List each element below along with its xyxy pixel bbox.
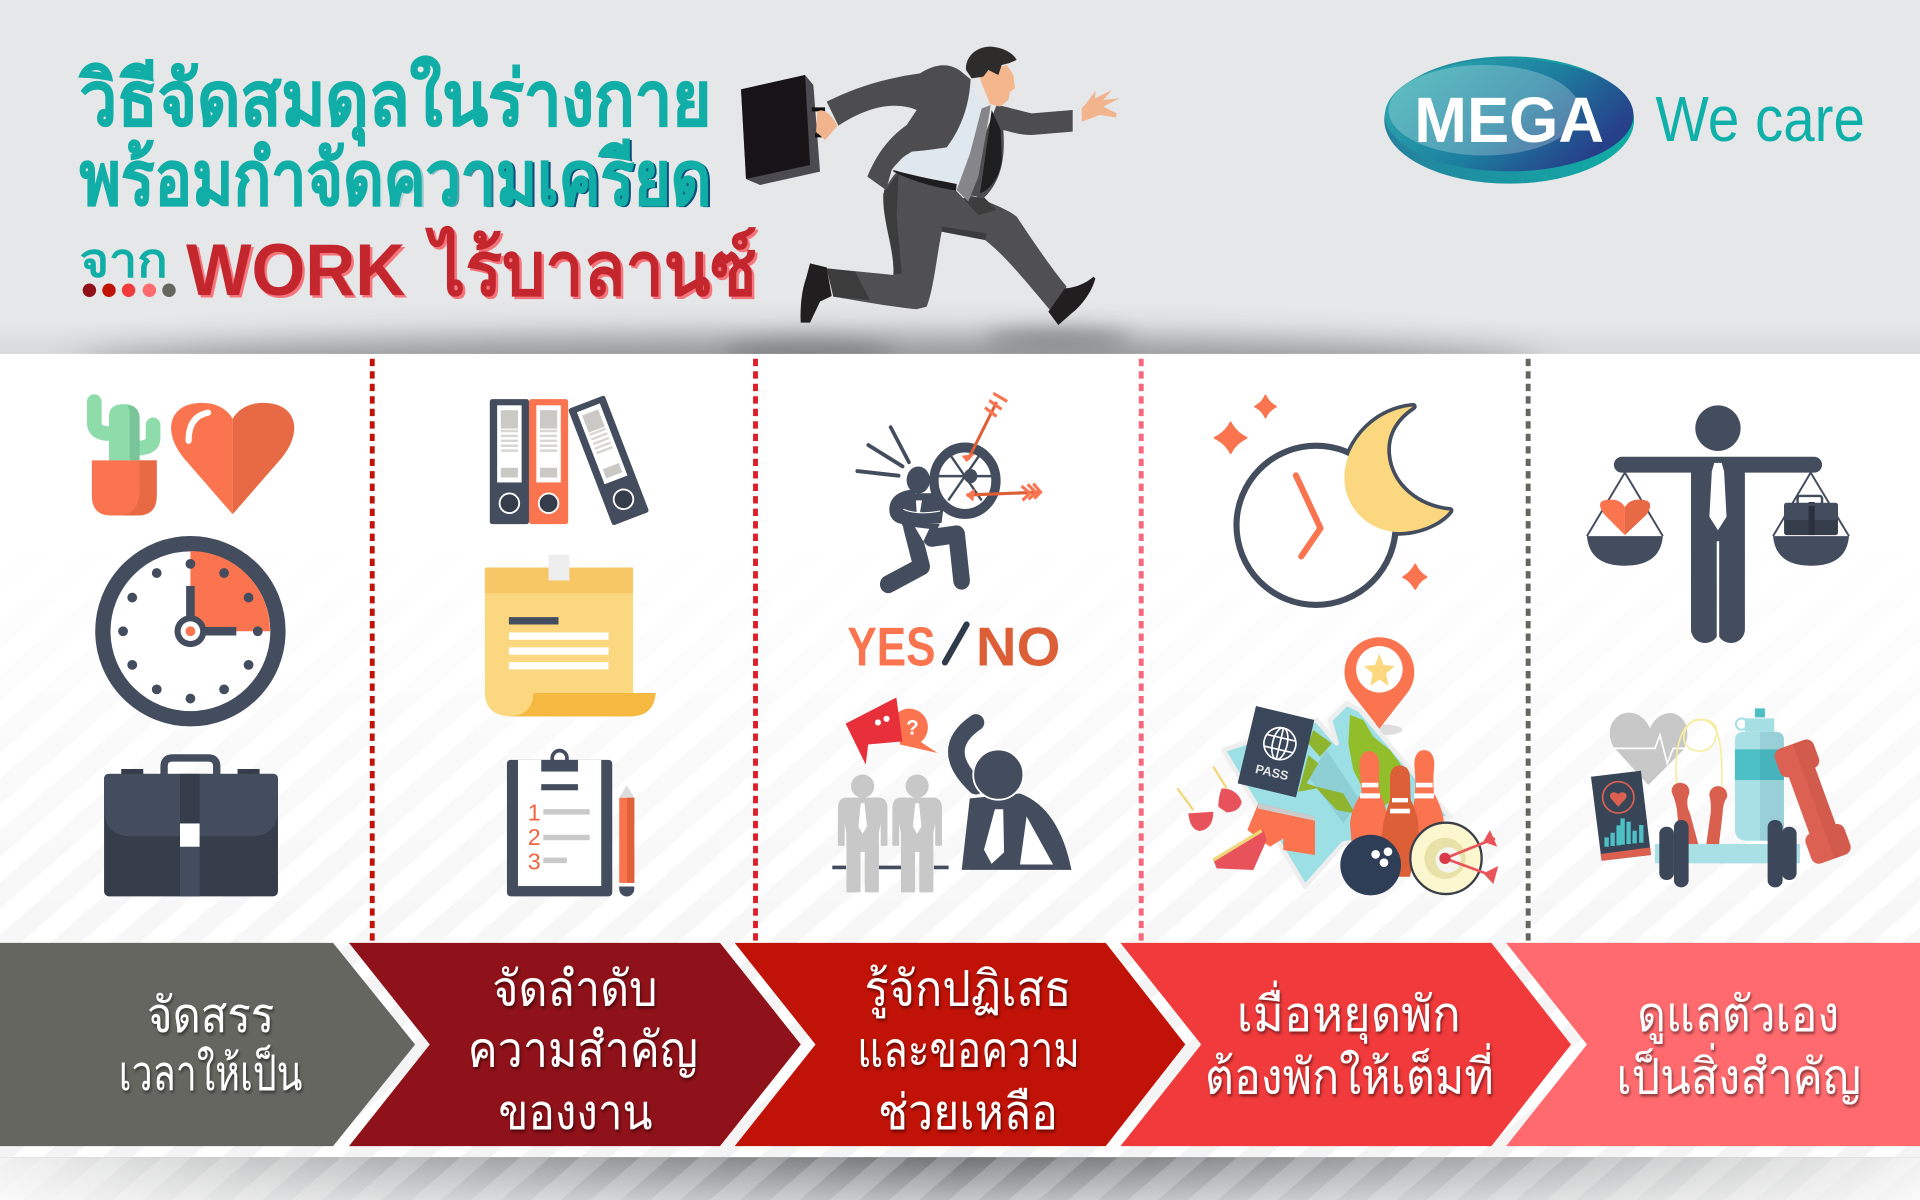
arrow: step 2: จัดลำดับ — [492, 962, 658, 1016]
icon: clock — [103, 544, 278, 719]
icon: sticky note — [485, 555, 656, 716]
arrow: step 4: ต้องพักให้เต็มที่ — [1205, 1042, 1494, 1104]
title: WORK — [186, 228, 405, 311]
icon: figure shielding arrows — [857, 393, 1041, 584]
arrow: step 3: รู้จักปฏิเสธ — [864, 962, 1071, 1018]
icon: map pin — [1344, 637, 1414, 735]
icon: travel and leisure items — [1177, 703, 1498, 895]
icon: cactus in pot — [92, 402, 157, 516]
dash baseline — [832, 866, 949, 869]
column dividers — [372, 359, 1528, 943]
arrow: step 1 — [0, 943, 415, 1146]
arrow: step 5: เป็นสิ่งสำคัญ — [1616, 1042, 1861, 1104]
arrow: step 2 — [349, 943, 801, 1146]
arrow: step 2: ของงาน — [498, 1086, 653, 1140]
logo: MEGA We care: MEGA — [1414, 85, 1604, 156]
title — [78, 55, 759, 315]
icon: balance scale figure — [1587, 405, 1849, 643]
icon: gray colleagues — [839, 774, 941, 891]
page background with diagonal stripes — [0, 354, 1920, 1200]
icon: speech bubbles: ? — [906, 717, 919, 740]
icon: heart — [171, 403, 294, 514]
title: วิธีจัดสมดุลในร่างกาย — [78, 55, 711, 147]
icon: clipboard and pencil: 2 — [528, 824, 541, 850]
title: จาก — [80, 235, 168, 287]
icon: binders — [490, 395, 649, 526]
header band — [0, 0, 1920, 354]
icon: clipboard and pencil — [507, 751, 634, 897]
icon: clipboard and pencil: 1 — [528, 799, 541, 825]
title: พร้อมกำจัดความเครียด — [82, 138, 714, 223]
icon: figure raising hand — [956, 722, 1071, 870]
arrow: step 3 — [735, 943, 1185, 1146]
arrow: step 2: ความสำคัญ — [468, 1024, 698, 1078]
arrow: step 1: จัดสรร — [147, 989, 274, 1043]
logo: MEGA We care — [1384, 56, 1865, 184]
YES / NO label: YES — [847, 616, 936, 678]
arrow: step 3: และขอความ — [857, 1024, 1080, 1078]
title: ไร้บาลานซ์ — [427, 228, 759, 315]
arrow: step 5: ดูแลตัวเอง — [1637, 988, 1839, 1044]
YES / NO label: NO — [976, 616, 1060, 678]
title: WORK — [189, 231, 408, 314]
YES / NO label — [847, 616, 1060, 678]
icon: clipboard and pencil: 3 — [528, 848, 541, 874]
arrow: step 5 — [1506, 943, 1920, 1146]
arrow: step 1: เวลาให้เป็น — [119, 1044, 302, 1101]
title: พร้อมกำจัดความเครียด — [80, 136, 711, 221]
logo: MEGA We care: We care — [1656, 84, 1865, 155]
arrow: step 3: ช่วยเหลือ — [878, 1086, 1058, 1140]
arrow: step 4: เมื่อหยุดพัก — [1237, 980, 1461, 1044]
arrow: step 4 — [1120, 943, 1571, 1146]
icon: fitness items — [1591, 708, 1853, 887]
icon: speech bubbles — [846, 697, 938, 765]
running businessman illustration — [741, 47, 1119, 325]
icon: briefcase — [104, 758, 278, 896]
title: ไร้บาลานซ์ — [425, 225, 757, 312]
icon: night clock and moon — [1215, 396, 1450, 605]
passport label: PASS — [1254, 762, 1290, 783]
bottom band and shadow — [0, 1146, 1920, 1200]
